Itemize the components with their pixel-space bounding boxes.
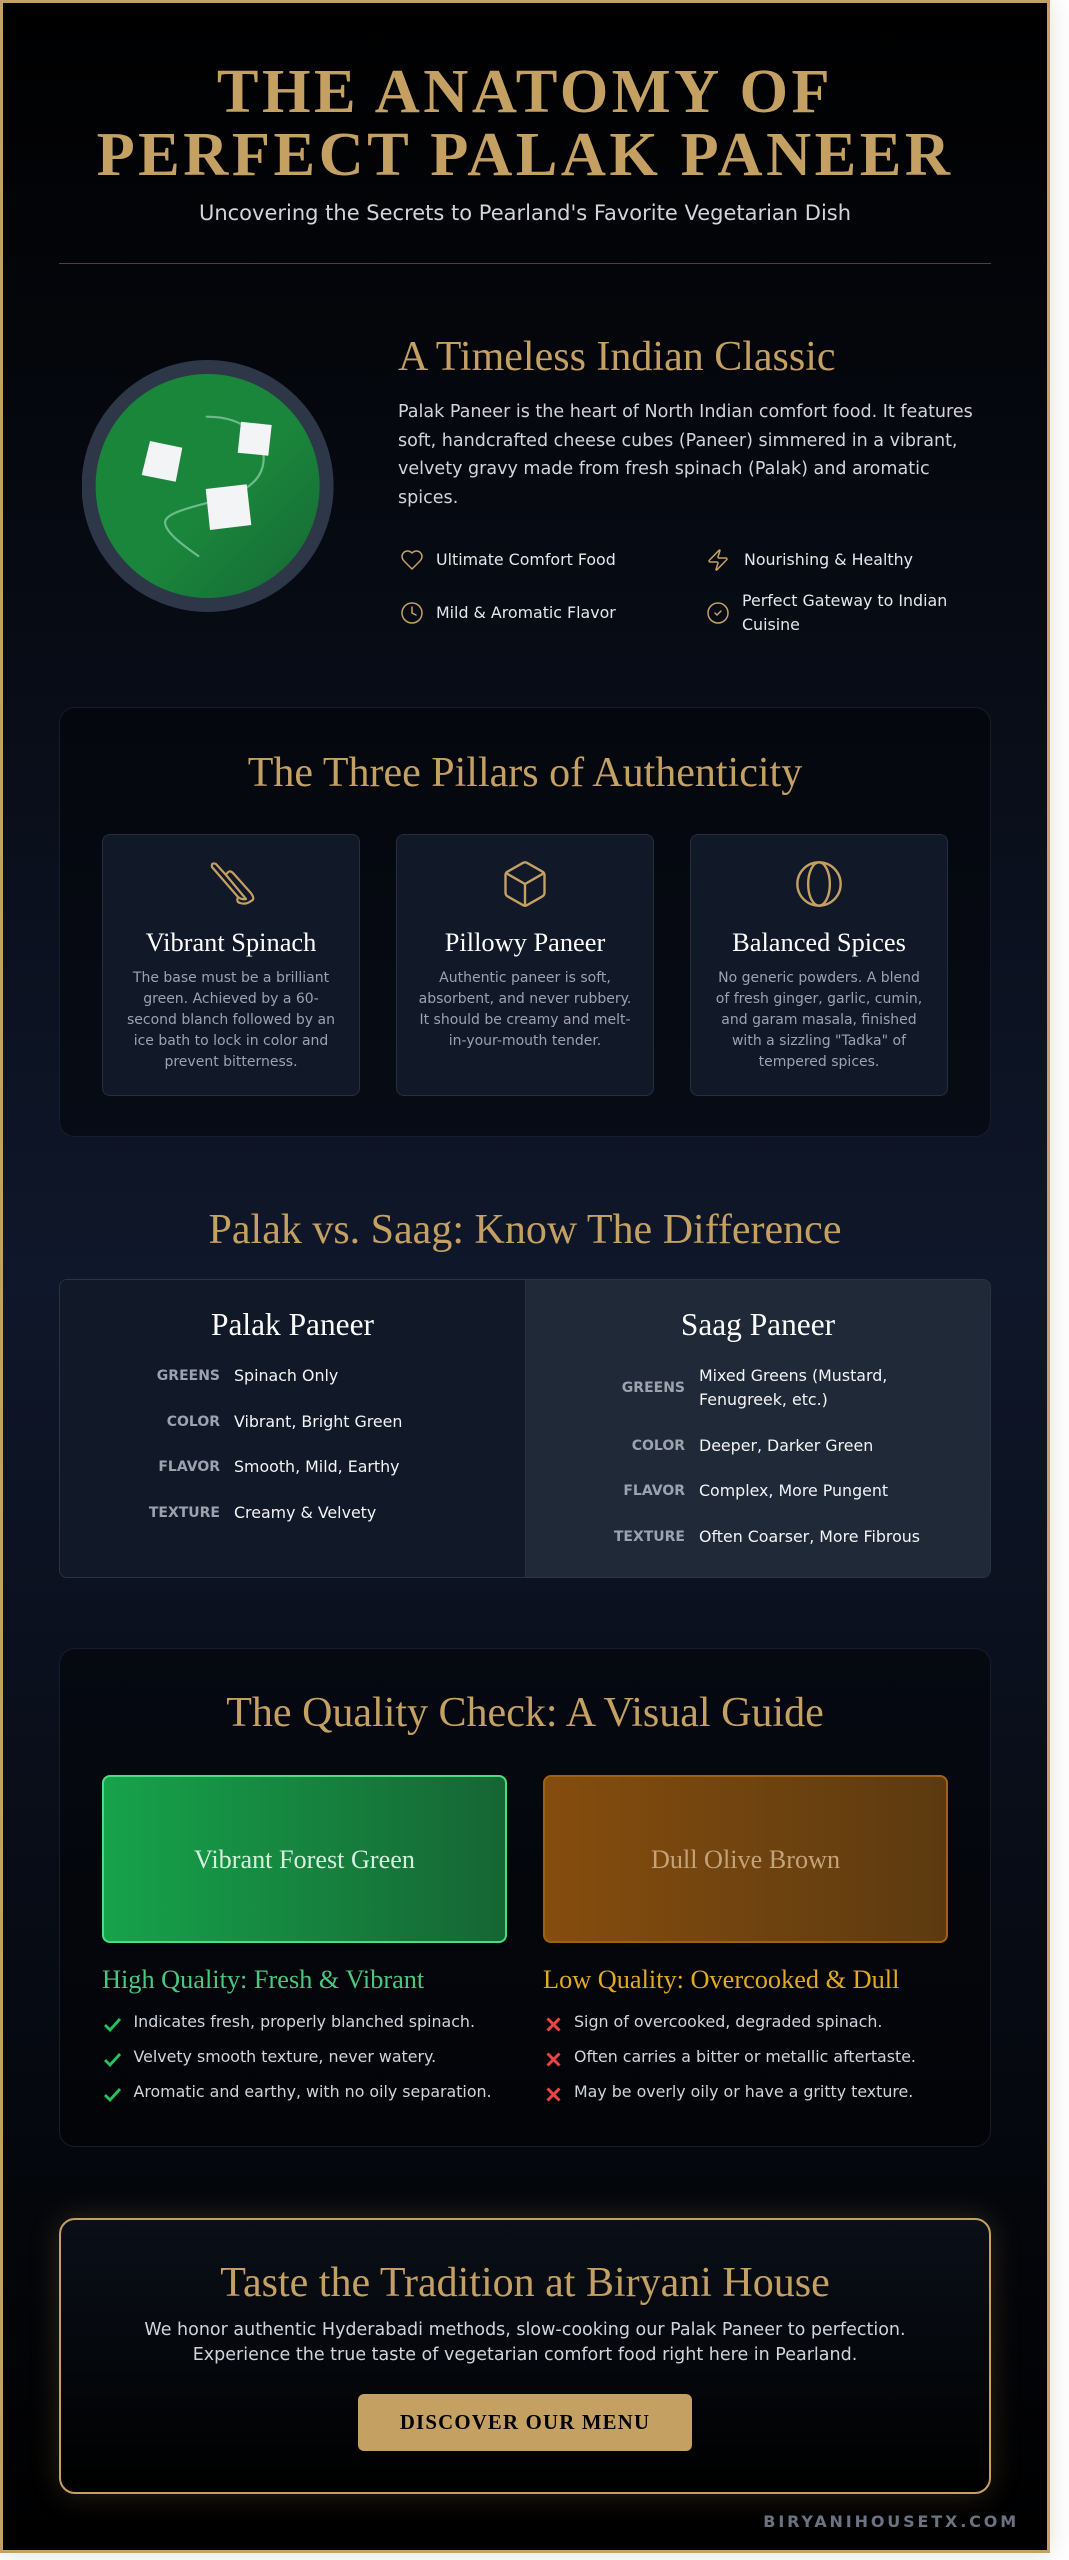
row: flavor: FLAVOR [623,1483,685,1499]
column: saag paneer: Deeper, Darker Green [699,1436,873,1454]
card description [716,970,922,1070]
column: palak paneer: Creamy & Velvety [234,1502,376,1522]
swatch: low quality [543,1775,948,1943]
column: palak paneer: Vibrant, Bright Green [234,1412,402,1430]
icon: crosses [546,2018,560,2102]
feature: comfort food: Ultimate Comfort Food [436,550,616,569]
column title: Palak Paneer [211,1307,374,1342]
title: THE ANATOMY OF [217,57,833,126]
row: texture: TEXTURE [614,1528,685,1544]
card description: No generic powders. A blend [718,970,920,986]
card description: absorbent, and never rubbery. [419,990,631,1006]
column: palak paneer [60,1280,525,1577]
list: high quality points: Aromatic and earthy, with no oily separation. [134,2082,492,2101]
panel: call to action [59,2218,991,2494]
card description: tempered spices. [759,1054,879,1070]
column: palak paneer: Spinach Only [234,1366,338,1385]
row: greens: GREENS [622,1380,685,1396]
icon: checks [104,2018,121,2102]
column: saag paneer [525,1280,990,1577]
card description: of fresh ginger, garlic, cumin, [716,990,922,1006]
column: saag paneer: Often Coarser, More Fibrous [699,1526,920,1546]
intro paragraph: velvety gravy made from fresh spinach (Palak) and aromatic [398,459,930,479]
cta paragraph: Experience the true taste of vegetarian comfort food right here in Pearland. [193,2344,857,2364]
cta paragraph [144,2320,906,2364]
intro paragraph: spices. [398,488,458,508]
panel: three pillars [59,707,991,1137]
card description: second blanch followed by an [127,1012,335,1028]
feature: gateway: Perfect Gateway to Indian [742,591,947,610]
icon: clock [401,602,423,624]
column: saag paneer: Fenugreek, etc.) [699,1390,828,1409]
card description: Authentic paneer is soft, [439,970,611,986]
icon: spinach leaf [210,862,254,905]
card description: The base must be a brilliant [133,970,329,986]
row: flavor: FLAVOR [158,1459,220,1475]
icon: check circle [707,602,729,624]
icon: spice seed [796,861,842,907]
button [358,2394,692,2451]
card description [419,970,631,1048]
card description [127,970,335,1070]
illustration: palak paneer bowl [82,360,334,612]
intro heading: A Timeless Indian Classic [398,334,836,380]
row: color: COLOR [167,1414,220,1430]
feature: gateway: Cuisine [742,615,800,634]
feature: gateway [707,591,947,634]
list: low quality points [546,2012,916,2102]
header divider [59,263,991,264]
panel: intro [82,334,973,634]
column: saag paneer: Complex, More Pungent [699,1481,888,1500]
button: DISCOVER OUR MENU [400,2411,650,2434]
list: high quality points: Velvety smooth texture, never watery. [134,2047,436,2066]
cta heading: Taste the Tradition at Biryani House [220,2260,830,2306]
column title: Saag Paneer [681,1307,835,1342]
card: vibrant spinach [102,834,360,1096]
footer: website: BIRYANIHOUSETX.COM [763,2512,1019,2531]
subtitle: Uncovering the Secrets to Pearland's Favorite Vegetarian Dish [199,201,851,225]
title [97,57,953,189]
quality heading: The Quality Check: A Visual Guide [226,1690,824,1736]
title: PERFECT PALAK PANEER [97,120,953,189]
panel: quality check [59,1648,991,2147]
swatch: high quality: Vibrant Forest Green [194,1845,415,1874]
list: low quality points: Often carries a bitter or metallic aftertaste. [574,2047,916,2066]
section heading: palak vs saag: Palak vs. Saag: Know The Difference [209,1207,841,1253]
low quality heading: Low Quality: Overcooked & Dull [543,1965,899,1994]
row: color: COLOR [632,1438,685,1454]
card description: prevent bitterness. [164,1054,298,1070]
card description: with a sizzling "Tadka" of [732,1032,906,1048]
feature: healthy: Nourishing & Healthy [744,550,913,569]
list: low quality points: May be overly oily or have a gritty texture. [574,2082,913,2101]
row: texture: TEXTURE [149,1504,220,1520]
card: pillowy paneer [396,834,654,1096]
card description: in-your-mouth tender. [449,1032,601,1048]
intro paragraph [398,402,973,508]
high quality heading: High Quality: Fresh & Vibrant [102,1965,424,1994]
pillars heading: The Three Pillars of Authenticity [248,750,802,796]
swatch: high quality [102,1775,507,1943]
column: palak paneer: Smooth, Mild, Earthy [234,1457,400,1476]
card description: It should be creamy and melt- [419,1012,631,1028]
comparison table [59,1279,991,1578]
icon: cube [504,861,546,907]
icon: heart [401,550,423,570]
card description: and garam masala, finished [721,1012,917,1028]
header [59,57,991,264]
card title: Pillowy Paneer [445,927,605,957]
card description: ice bath to lock in color and [134,1032,328,1048]
list: high quality points: Indicates fresh, properly blanched spinach. [134,2012,475,2031]
feature: mild flavor: Mild & Aromatic Flavor [436,603,616,622]
cta paragraph: We honor authentic Hyderabadi methods, slow-cooking our Palak Paneer to perfection. [144,2320,906,2340]
row: greens: GREENS [157,1368,220,1384]
card title: Vibrant Spinach [146,927,316,957]
swatch: low quality: Dull Olive Brown [651,1845,840,1874]
intro paragraph: Palak Paneer is the heart of North Indian comfort food. It features [398,402,973,422]
icon: bolt [708,549,728,571]
column: saag paneer: Mixed Greens (Mustard, [699,1366,887,1385]
list: low quality points: Sign of overcooked, degraded spinach. [574,2012,882,2031]
card description: green. Achieved by a 60- [143,990,319,1006]
intro paragraph: soft, handcrafted cheese cubes (Paneer) simmered in a vibrant, [398,431,958,451]
list: high quality points [104,2012,492,2102]
card title: Balanced Spices [732,927,906,957]
card: balanced spices [690,834,948,1096]
